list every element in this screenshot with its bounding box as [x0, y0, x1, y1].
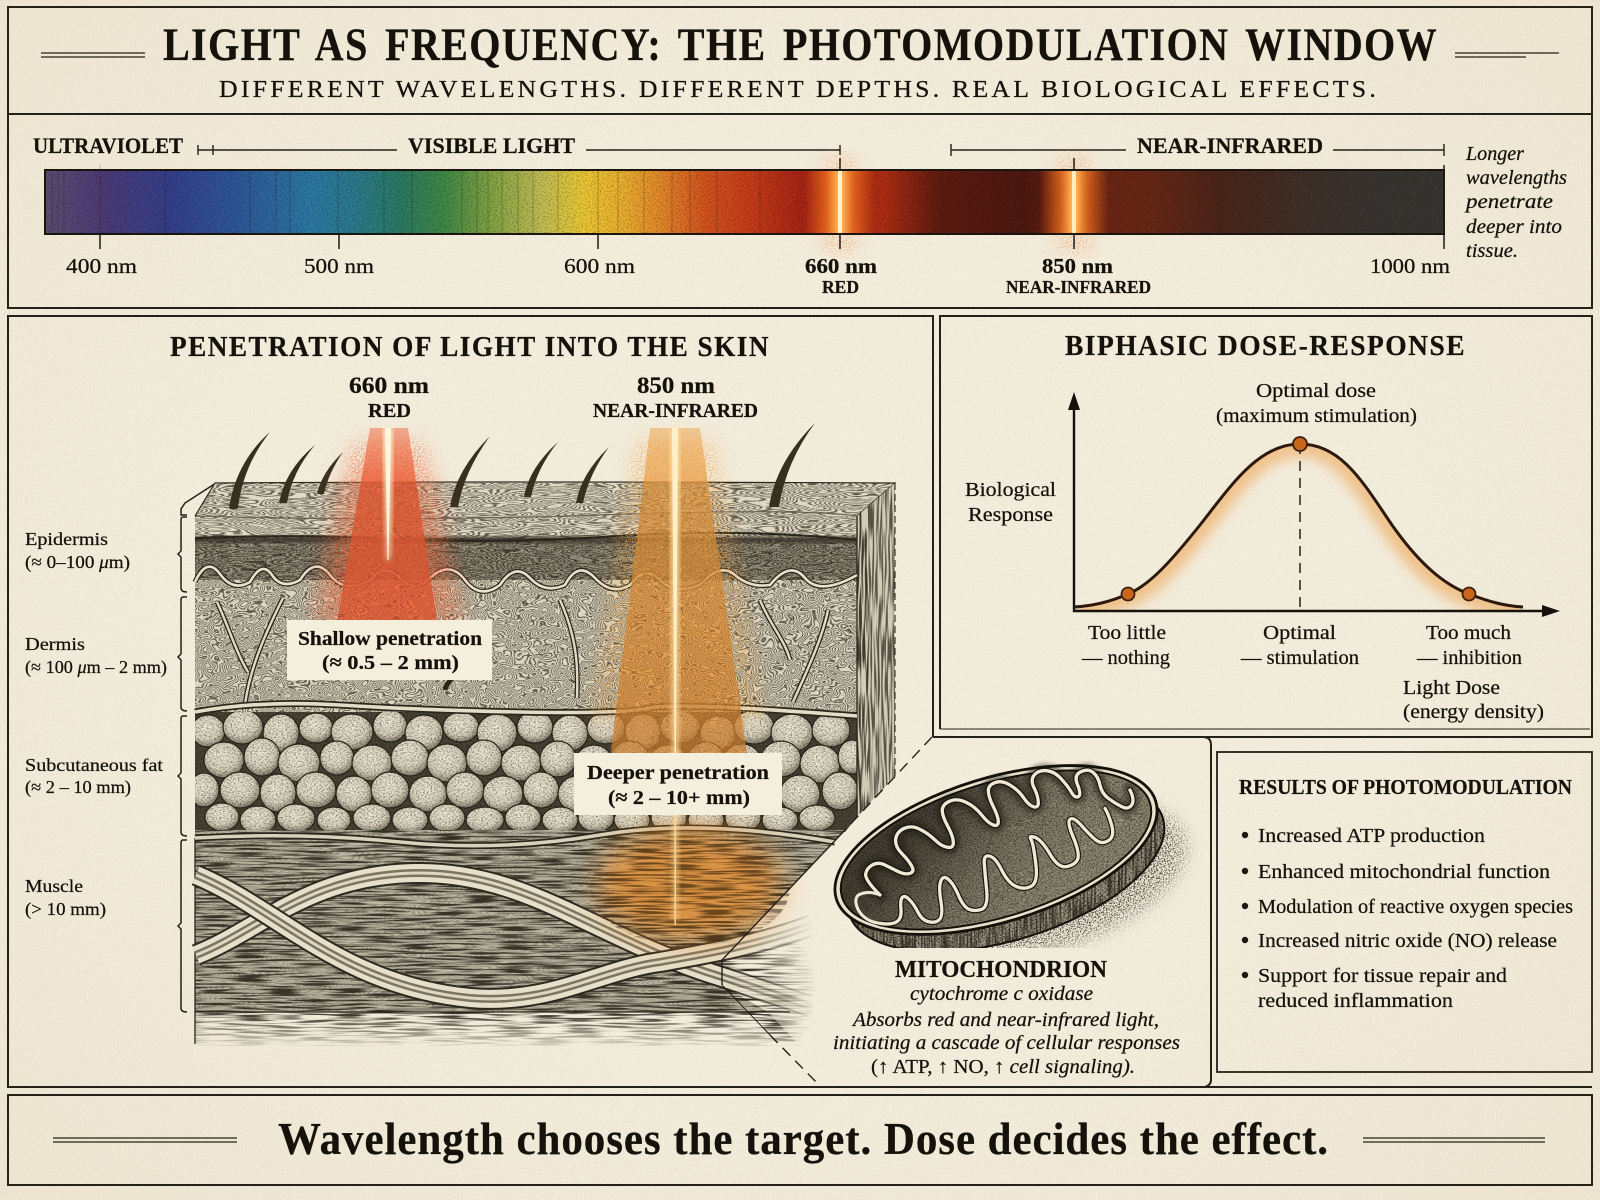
hairs [229, 423, 815, 510]
beam labels: NEAR-INFRARED [593, 400, 758, 422]
chart labels: Too little [1088, 622, 1166, 644]
blood vessels [217, 598, 828, 704]
epidermal junction [195, 567, 857, 591]
beam labels [349, 373, 758, 422]
wavelength labels: 850 nm [1042, 254, 1114, 278]
label: shallow penetration [287, 620, 492, 680]
range labels [33, 133, 1444, 158]
wavelength labels: 500 nm [304, 254, 374, 278]
wavelength labels: RED [822, 277, 859, 297]
muscle hatch fade right [722, 940, 814, 1042]
heading: RESULTS OF PHOTOMODULATION [1239, 775, 1572, 799]
label: shallow penetration: Shallow penetration [298, 628, 483, 650]
footer statement: Wavelength chooses the target. Dose decides the effect. [278, 1113, 1329, 1164]
ticks [100, 158, 1444, 249]
bullet list: Increased nitric oxide (NO) release [1258, 930, 1557, 952]
subtitle: DIFFERENT WAVELENGTHS. DIFFERENT DEPTHS. REAL BIOLOGICAL EFFECTS. [219, 77, 1379, 103]
side note: Longer [1465, 143, 1524, 165]
epidermis [195, 483, 893, 580]
zoom wedge lines [722, 737, 932, 1086]
muscle [190, 830, 850, 1020]
side note [1464, 143, 1567, 262]
mitochondrion text: initiating a cascade of cellular responses [833, 1032, 1180, 1054]
range labels: NEAR-INFRARED [1137, 133, 1323, 158]
panel: header frame [8, 7, 1592, 308]
chart labels [965, 380, 1544, 723]
dermis [190, 578, 860, 714]
chart labels: Response [968, 504, 1053, 526]
axes [1068, 392, 1560, 617]
curve glow [1074, 444, 1523, 607]
panel: results frame [1217, 752, 1592, 1072]
inner matrix [842, 772, 1150, 928]
layer labels: (≈ 0–100 μm) [25, 552, 130, 573]
illustration: mitochondrion [834, 760, 1199, 948]
illustration: skin cross-section [189, 423, 900, 1090]
muscle hatch fade bottom [195, 1012, 805, 1046]
panel: spectrum [33, 133, 1567, 297]
layer labels [25, 529, 167, 920]
fat-muscle boundary [195, 828, 835, 846]
beam labels: 660 nm [349, 373, 429, 398]
wavelength labels: 600 nm [564, 254, 635, 278]
wavelength labels: 400 nm [66, 254, 137, 278]
panel: penetration frame and mitochondrion bay [8, 316, 1592, 1087]
chart labels: Optimal dose [1256, 380, 1376, 402]
muscle ribbons [196, 873, 812, 1006]
wavelength labels: 1000 nm [1370, 254, 1450, 278]
side note: wavelengths [1466, 167, 1567, 189]
spectrum bar [45, 157, 1444, 251]
layer labels: Dermis [25, 634, 85, 654]
beam: red [310, 428, 466, 630]
chart labels: Light Dose [1403, 677, 1500, 699]
bullet list: Support for tissue repair and [1258, 965, 1507, 987]
layer braces [178, 483, 216, 1012]
layer labels: (≈ 100 μm – 2 mm) [25, 657, 167, 678]
chart labels: — nothing [1081, 647, 1170, 669]
chart labels: Biological [965, 479, 1056, 501]
bullet list: reduced inflammation [1258, 990, 1453, 1012]
bullet list [1242, 825, 1573, 1012]
stipple shadow [986, 796, 1199, 948]
layer labels: Muscle [25, 876, 83, 896]
layer labels: (≈ 2 – 10 mm) [25, 777, 131, 798]
bullet list: Modulation of reactive oxygen species [1258, 896, 1573, 918]
chart labels: Optimal [1263, 622, 1336, 644]
mitochondrion text: cytochrome c oxidase [910, 983, 1093, 1005]
glow: 660 nm [805, 157, 875, 251]
dermis-fat boundary [195, 704, 857, 716]
chart labels: (maximum stimulation) [1216, 405, 1417, 427]
panel: results of photomodulation [1239, 775, 1573, 1012]
chart labels: — inhibition [1416, 647, 1522, 669]
panel: biphasic dose-response [965, 331, 1560, 723]
side face [857, 484, 895, 816]
beam labels: RED [368, 400, 411, 422]
label: deeper penetration: Deeper penetration [587, 762, 770, 784]
glow: 850 nm [1039, 157, 1109, 251]
label: deeper penetration [574, 753, 782, 815]
rim [815, 732, 1177, 968]
bullet list: Increased ATP production [1258, 825, 1485, 847]
range labels: ULTRAVIOLET [33, 133, 183, 158]
mitochondrion text [833, 957, 1180, 1078]
chart labels: Too much [1426, 622, 1511, 644]
layer labels: Epidermis [25, 529, 108, 549]
panel: footer [8, 1095, 1592, 1185]
chart labels: (energy density) [1403, 701, 1544, 723]
wavelength labels: NEAR-INFRARED [1006, 277, 1151, 297]
outer body [850, 806, 1166, 948]
panel: dose-response frame [940, 316, 1592, 737]
mitochondrion text: MITOCHONDRION [895, 957, 1108, 983]
wavelength labels: 660 nm [805, 254, 878, 278]
bullet list: Enhanced mitochondrial function [1258, 861, 1550, 883]
layer labels: (> 10 mm) [25, 899, 106, 920]
label: deeper penetration: (≈ 2 – 10+ mm) [608, 787, 750, 809]
wavelength labels [66, 254, 1450, 297]
fat [189, 708, 866, 836]
dashed line [1299, 444, 1301, 611]
mitochondrion text: Absorbs red and near-infrared light, [851, 1009, 1159, 1031]
chart labels: — stimulation [1240, 647, 1359, 669]
beam labels: 850 nm [637, 373, 715, 398]
side note: tissue. [1466, 240, 1518, 262]
heading: BIPHASIC DOSE-RESPONSE [1065, 331, 1466, 362]
side note: deeper into [1466, 216, 1562, 238]
beam: near-infrared [590, 428, 790, 948]
response curve [1074, 444, 1523, 607]
label: shallow penetration: (≈ 0.5 – 2 mm) [322, 652, 459, 674]
heading: penetration: PENETRATION OF LIGHT INTO THE SKIN [170, 332, 770, 363]
side note: penetrate [1464, 191, 1553, 213]
mitochondrion text: (↑ ATP, ↑ NO, ↑ cell signaling). [871, 1056, 1135, 1078]
range labels: VISIBLE LIGHT [408, 133, 575, 158]
dose points [1122, 437, 1476, 600]
layer labels: Subcutaneous fat [25, 755, 163, 775]
cristae [856, 770, 1133, 924]
